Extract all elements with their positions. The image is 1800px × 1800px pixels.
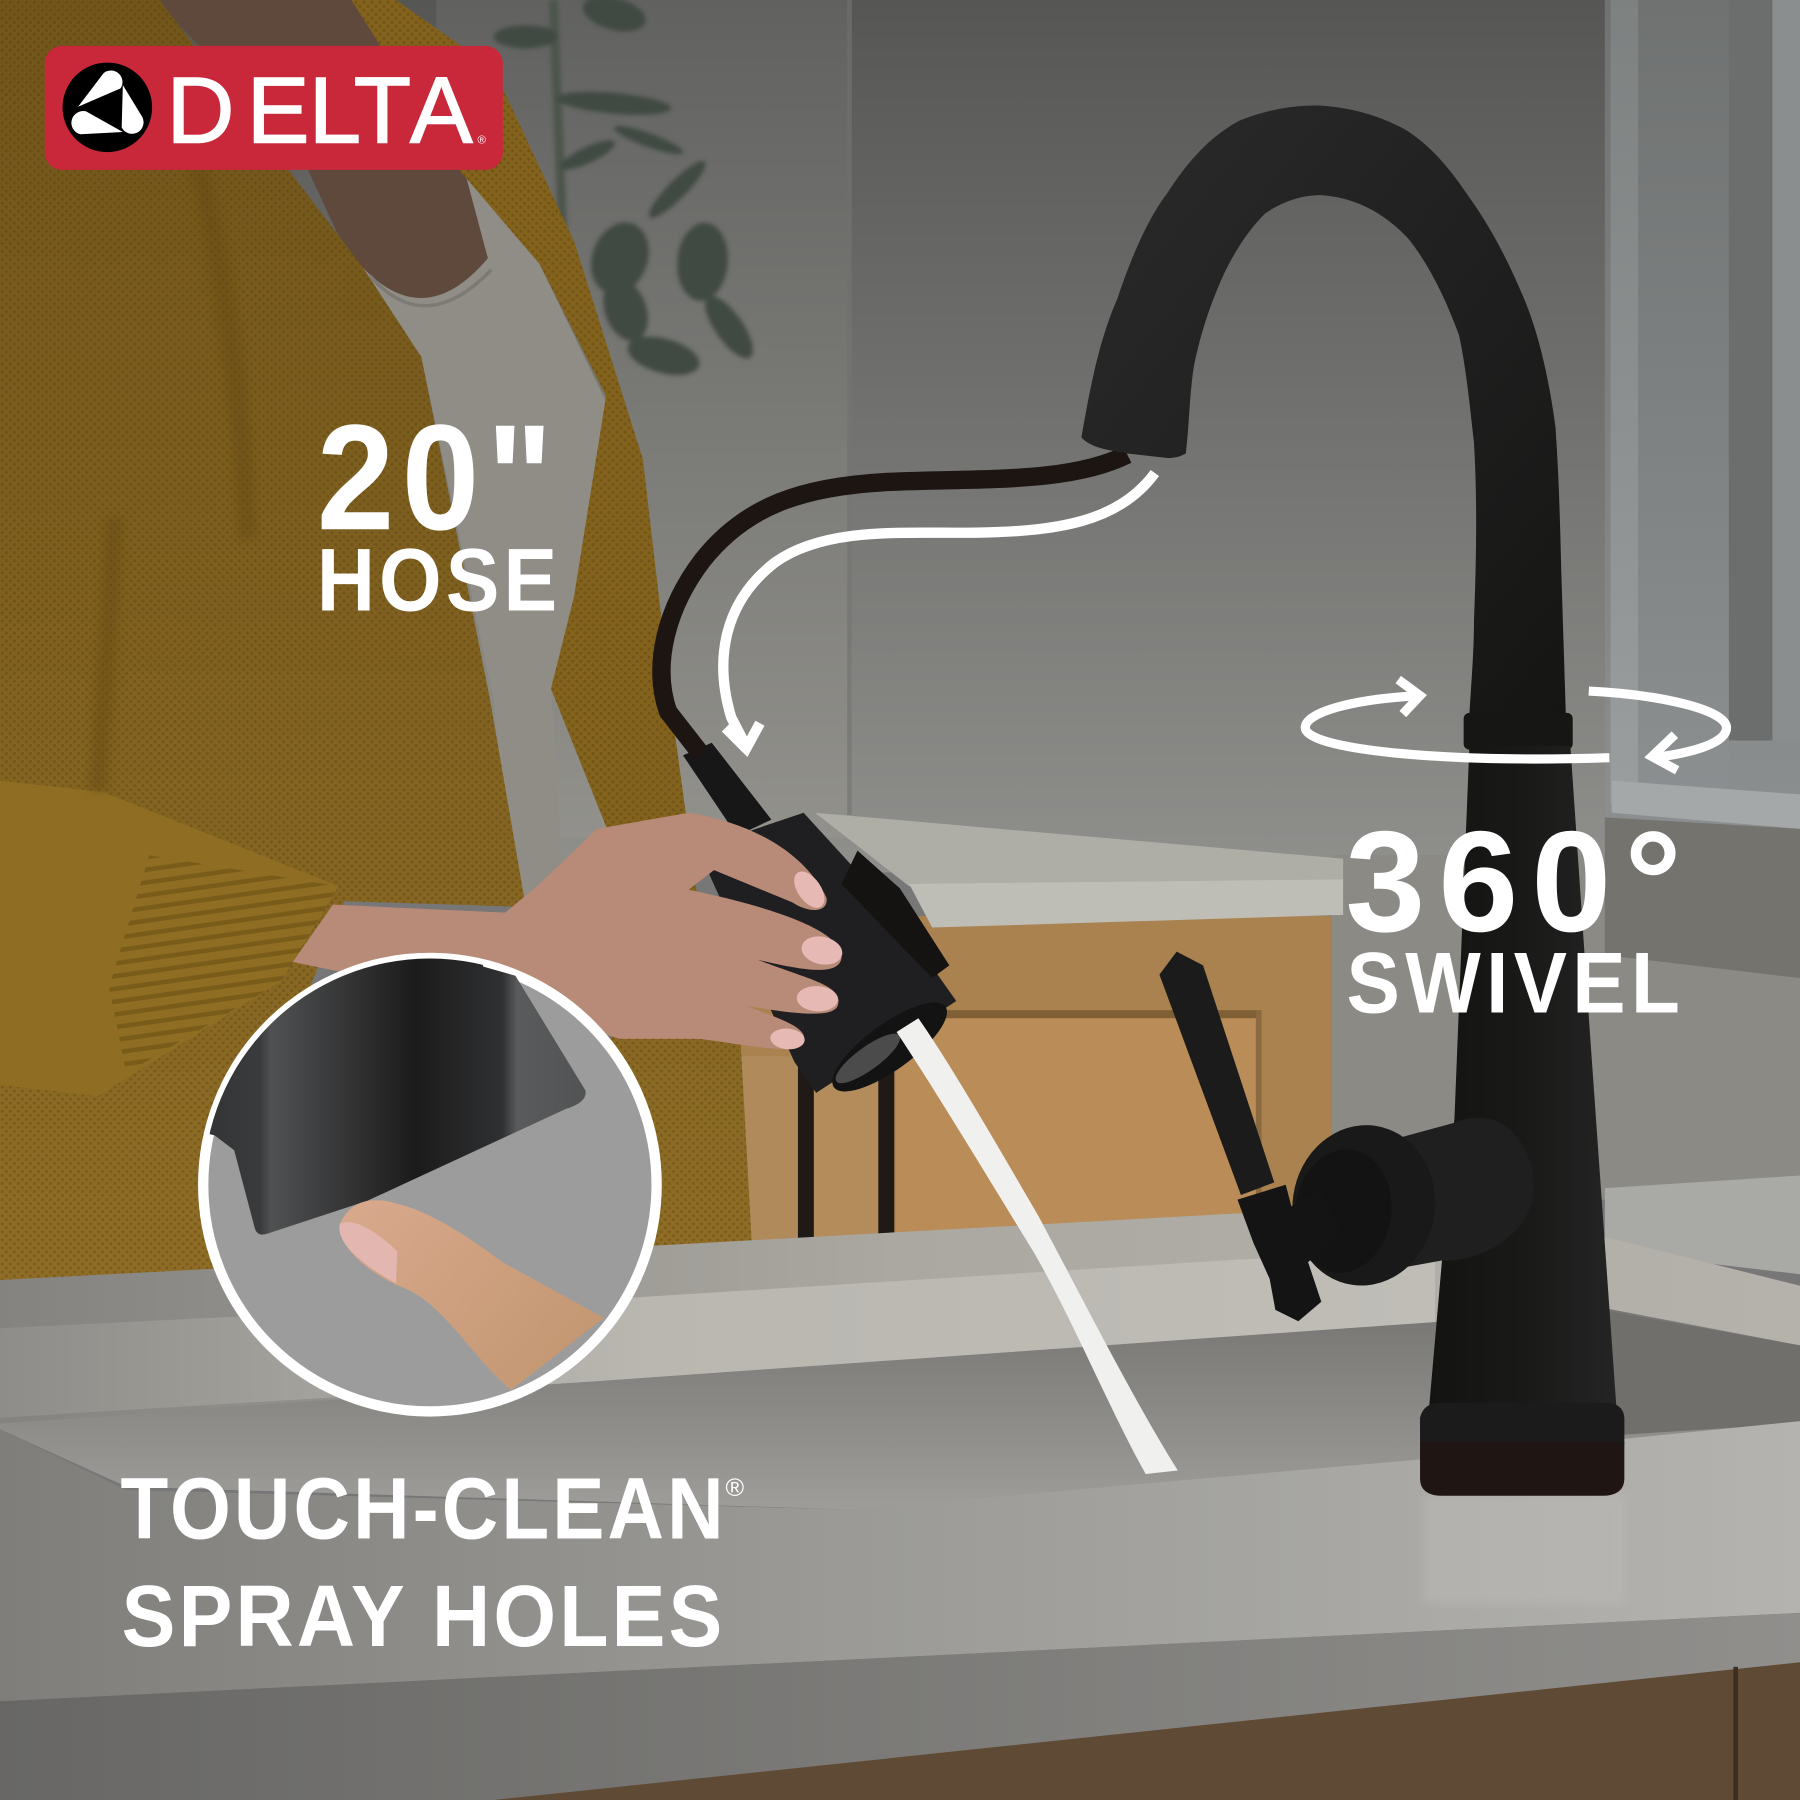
label: 20 inch hose: HOSE bbox=[317, 530, 561, 630]
spray hose bbox=[661, 455, 1127, 753]
pull-down spray head bbox=[683, 743, 959, 1106]
faucet spout and body bbox=[1081, 105, 1624, 1496]
water stream bbox=[897, 1018, 1178, 1474]
inset spray head bbox=[195, 941, 586, 1235]
woman: mustard cardigan bbox=[0, 0, 752, 1291]
arrow: swivel rotation bbox=[1305, 680, 1727, 770]
wordmark: DELTA bbox=[166, 57, 473, 162]
logo mark bbox=[63, 63, 152, 152]
label: 360 degree swivel: SWIVEL bbox=[1347, 936, 1685, 1031]
forearm and hand bbox=[293, 813, 845, 1051]
wooden cabinet bbox=[740, 916, 1332, 1249]
inset circle: touch-clean spray holes bbox=[195, 941, 657, 1411]
label: touch-clean spray holes bbox=[121, 1460, 745, 1665]
logo badge bbox=[45, 46, 503, 170]
label: 20 inch hose bbox=[317, 393, 561, 630]
label: touch-clean spray holes: TOUCH-CLEAN bbox=[121, 1460, 727, 1557]
registered mark: ® bbox=[478, 134, 487, 146]
label: touch-clean spray holes: ® bbox=[726, 1474, 745, 1502]
label: 360 degree swivel: 360° bbox=[1345, 802, 1682, 962]
side counter bbox=[815, 813, 1343, 928]
label: touch-clean spray holes: SPRAY HOLES bbox=[122, 1568, 726, 1665]
plant bbox=[494, 0, 761, 382]
background: kitchen wall and window bbox=[0, 0, 1800, 1274]
sink counter bbox=[0, 1213, 1800, 1800]
arrow: hose extension bbox=[723, 473, 1155, 748]
woman: shirt and neck bbox=[155, 0, 606, 918]
label: 360 degree swivel bbox=[1345, 802, 1685, 1032]
inset fingertip bbox=[339, 1200, 604, 1390]
label: 20 inch hose: 20" bbox=[317, 393, 560, 561]
